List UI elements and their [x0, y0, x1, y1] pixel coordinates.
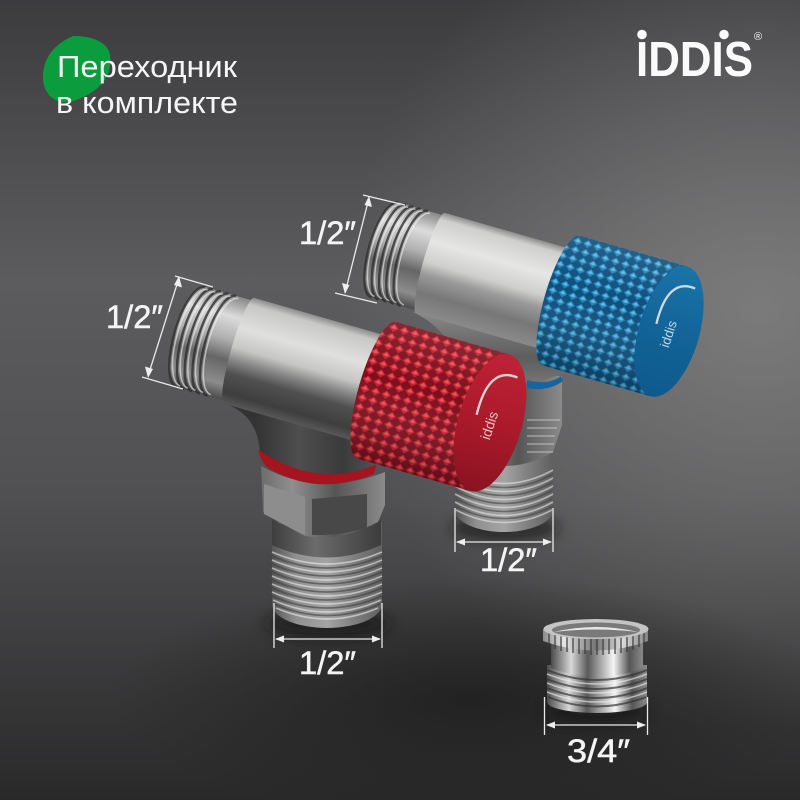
dimension marks — [142, 195, 648, 735]
red valve collar and hex nut — [261, 466, 385, 537]
size label: top 1/2: 1/2″ — [299, 215, 356, 251]
size label: red stem 1/2: 1/2″ — [299, 645, 356, 681]
blue knurled knob — [526, 231, 717, 405]
dimension: blue top thread — [335, 195, 405, 303]
blue knob arc mark — [656, 281, 695, 331]
size label: left 1/2: 1/2″ — [106, 299, 163, 335]
red knob face — [440, 346, 540, 500]
blue knob face — [621, 258, 717, 405]
adapter thread — [547, 665, 647, 713]
adapter neck — [551, 640, 643, 677]
heading: в комплекте — [56, 85, 238, 120]
blue knob logo: iddis — [657, 318, 680, 349]
blue valve body — [355, 195, 582, 353]
dimension: adapter — [544, 697, 648, 735]
blue valve — [355, 195, 717, 532]
logo: IDDIS — [636, 33, 753, 87]
logo: ® — [754, 31, 762, 43]
dimension: red bottom thread — [274, 603, 382, 648]
blue valve elbow — [413, 290, 590, 389]
heading: Переходник — [57, 49, 237, 84]
red valve stem — [272, 520, 382, 628]
adapter fitting 3/4 — [543, 619, 648, 713]
red valve elbow — [223, 360, 400, 478]
blue valve stem — [452, 376, 562, 532]
red valve body — [159, 279, 398, 445]
red knob logo: iddis — [477, 409, 501, 442]
adapter knurled ring — [543, 619, 648, 655]
red sealing ring — [260, 452, 375, 483]
heading — [56, 49, 238, 120]
size label: adapter 3/4: 3/4″ — [567, 733, 630, 769]
dimension: red left thread — [142, 276, 213, 389]
green blob — [43, 36, 110, 102]
dimension: blue bottom thread — [455, 508, 553, 552]
contact shadows — [266, 516, 648, 721]
red knob arc mark — [477, 369, 518, 423]
red knurled knob — [340, 317, 540, 500]
red valve — [159, 279, 540, 628]
size label: blue stem 1/2: 1/2″ — [480, 542, 537, 578]
